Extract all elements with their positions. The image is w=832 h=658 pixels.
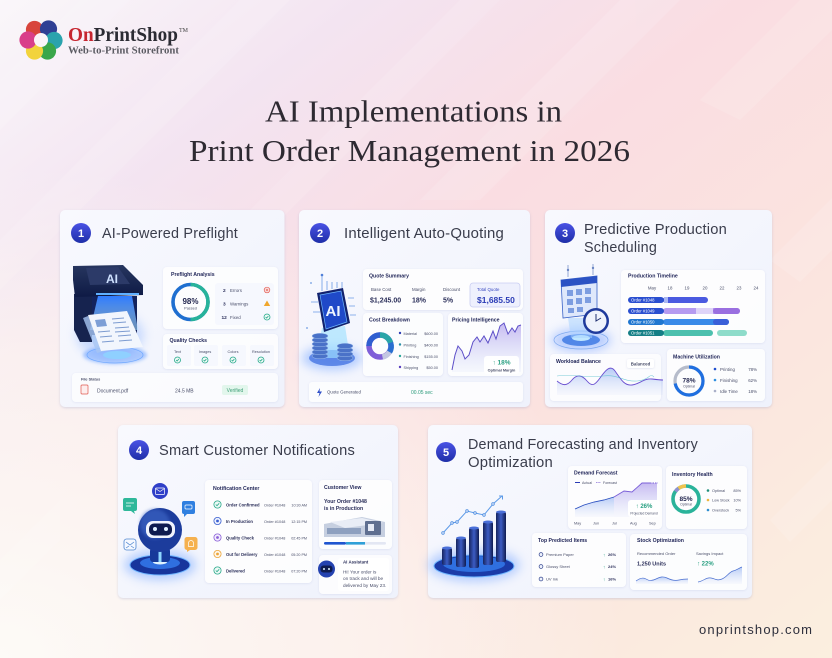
panel: Customer View: is in Production: [324, 506, 363, 512]
row: Quality Check: Quality Check: [226, 536, 255, 540]
row: Quality Check: 02:45 PM: [291, 536, 307, 540]
row: Order Confirmed: Order #1048: [264, 504, 285, 508]
legend: Optimal: [712, 489, 725, 493]
row: Out for Delivery: Out for Delivery: [226, 552, 258, 557]
legend: $155.00: [424, 355, 438, 359]
panel: File Status: [72, 373, 278, 402]
donut 85%: Optimal: [680, 502, 692, 506]
callout +18%: Optimal Margin: [488, 368, 516, 372]
panel: Stock Optimization: ↑ 22%: [697, 562, 714, 568]
row: Quality Check: [214, 534, 307, 541]
badge 4: [129, 440, 149, 460]
panel: Quote Generated: 00.05 sec: [411, 390, 433, 396]
panel: Demand Forecast: Jun: [593, 522, 599, 526]
panel: Production Timeline: 19: [685, 286, 690, 290]
status rows: Fixed: [230, 315, 241, 320]
panel: Customer View: Customer View: [324, 485, 362, 491]
badge 3: 3: [562, 228, 568, 240]
panel: Demand Forecast: [568, 466, 662, 529]
legend: $400.00: [424, 344, 438, 348]
callout +18%: [484, 356, 519, 374]
badge 3: [555, 223, 575, 243]
panel: Workload Balance: [550, 354, 663, 401]
legend: Finishing: [404, 355, 419, 359]
donut 98%: 98%: [182, 297, 199, 306]
panel: Quote Generated: [309, 382, 523, 402]
panel: Machine Utilization: Machine Utilization: [673, 354, 720, 360]
row: Order Confirmed: [214, 501, 307, 508]
panel: Customer View: Your Order #1048: [324, 499, 367, 505]
bot avatar: [318, 560, 335, 578]
panel: Demand Forecast: Jul: [612, 522, 617, 526]
illustration: calendar and clock: [551, 264, 611, 352]
logo: [19, 20, 189, 60]
panel: Demand Forecast: May: [574, 522, 581, 526]
panel: Quote Summary: Total Quote: [477, 287, 500, 292]
callout +18%: ↑ 18%: [492, 360, 511, 366]
row: Delivered: [214, 567, 307, 574]
badge 5: 5: [443, 447, 449, 459]
panel: Notification Center: [205, 480, 312, 583]
status rows: 3: [223, 302, 226, 308]
row: Out for Delivery: 05:20 PM: [291, 553, 307, 557]
illustration: robot and message icons: [123, 483, 198, 580]
legend: 78%: [748, 367, 757, 372]
title: AI Implementations in: [265, 94, 563, 128]
panel: Top Predicted Items: Top Predicted Items: [538, 538, 587, 544]
legend: Overstock: [712, 508, 729, 512]
heading: Optimization: [468, 455, 553, 471]
sparkline: order: [636, 577, 688, 584]
legend: 10%: [733, 498, 742, 502]
illustration: AI chip and coins: AI: [326, 303, 340, 320]
icon: green chat: [123, 498, 137, 514]
row: Delivered: 07:20 PM: [291, 570, 307, 574]
donut 85%: [673, 486, 699, 512]
donut 98%: [173, 284, 208, 320]
panel: Quote Generated: Quote Generated: [327, 390, 361, 394]
panel: Notification Center: Notification Center: [213, 486, 259, 492]
heading: Demand Forecasting and Inventory: [468, 437, 699, 453]
panel: Demand Forecast: Sep: [649, 522, 656, 526]
heading: Predictive Production: [584, 222, 727, 238]
sparkline: savings: [698, 567, 742, 584]
row: In Production: In Production: [226, 519, 253, 524]
panel: card 1 AI-Powered Preflight: [60, 210, 284, 407]
illustration: AI chip and coins: [302, 274, 362, 370]
callout +26%: ↑ 26%: [636, 504, 653, 510]
badge 2: 2: [317, 228, 323, 240]
panel: Cost Breakdown: [363, 313, 443, 376]
panel: Workload Balance: Workload Balance: [556, 359, 601, 365]
heading: Scheduling: [584, 240, 657, 256]
badge 5: [436, 442, 456, 462]
icon: orange bell: [184, 537, 198, 552]
donut 78%: Optimal: [683, 384, 695, 388]
gantt bars: Order #1049: [631, 309, 655, 314]
row: In Production: Order #1048: [264, 520, 285, 524]
status rows: Errors: [230, 288, 243, 293]
panel: Production Timeline: 22: [720, 286, 725, 290]
gantt bars: Order #1051: [631, 331, 655, 336]
footer url: onprintshop.com: [699, 622, 812, 637]
donut 78%: [675, 367, 703, 395]
heading: [584, 222, 727, 256]
panel: AI Assistant: on track and will be: [343, 576, 384, 581]
badge 1: 1: [78, 228, 84, 240]
status rows: Warnings: [230, 302, 249, 306]
legend: [399, 332, 438, 370]
panel: Production Timeline: May: [648, 286, 657, 290]
legend: Printing: [720, 367, 735, 372]
row: Order Confirmed: 10:30 AM: [291, 504, 307, 508]
status rows: 12: [222, 315, 227, 321]
icon: white mail: [124, 539, 136, 550]
press machine: [324, 517, 385, 537]
panel: Production Timeline: 23: [737, 286, 742, 290]
rows: ↑: [603, 552, 605, 557]
panel: Quote Summary: $1,245.00: [370, 298, 401, 304]
panel: File Status: Verified: [227, 388, 244, 394]
rows: UV Ink: [546, 576, 558, 582]
panel: Quality Checks: Quality Checks: [170, 338, 207, 344]
panel: Quote Summary: [363, 269, 523, 310]
rows: ↑: [603, 564, 605, 569]
panel: Demand Forecast: Actual: [582, 481, 592, 485]
panel: Stock Optimization: Recommended Order: [637, 551, 676, 556]
panel: Quote Summary: 5%: [443, 298, 454, 304]
status rows: [215, 283, 274, 325]
panel: Stock Optimization: [630, 534, 747, 590]
rows: Premium Paper: [546, 552, 574, 557]
panel: card 3 Predictive Production Scheduling: [545, 210, 772, 407]
panel: Production Timeline: 18: [668, 286, 673, 290]
status rows: 2: [223, 288, 226, 294]
legend: 62%: [748, 378, 757, 383]
panel: card 2 Intelligent Auto-Quoting: [299, 210, 530, 407]
legend: Printing: [404, 344, 416, 348]
panel: Inventory Health: [666, 466, 747, 529]
panel: Pricing Intelligence: [448, 313, 523, 376]
row: Delivered: Order #1048: [264, 570, 285, 574]
title: Print Order Management in 2026: [189, 133, 630, 168]
panel: Quote Summary: $1,685.50: [477, 295, 515, 305]
panel: AI Assistant: delivered by May 23.: [343, 583, 386, 588]
rows: ↑: [603, 577, 605, 582]
panel: Demand Forecast: Demand Forecast: [574, 470, 618, 476]
legend: $50.00: [426, 366, 438, 370]
logo wordmark: OnPrintShop: [68, 24, 178, 46]
heading: AI-Powered Preflight: [102, 226, 238, 242]
panel: Stock Optimization: Savings Impact: [696, 551, 724, 556]
legend: Material: [404, 332, 417, 336]
legend: Low Stock: [712, 498, 730, 502]
rows: [539, 552, 616, 582]
panel: Preflight Analysis: Preflight Analysis: [171, 272, 215, 278]
donut 85%: 85%: [679, 496, 693, 503]
gantt bars: [628, 297, 747, 336]
panel: AI Assistant: Hi! Your order is: [343, 570, 377, 574]
panel: File Status: File Status: [81, 378, 100, 382]
panel: card 5 Demand Forecasting and Inventory Optimization: [428, 425, 752, 598]
legend: 85%: [733, 489, 742, 493]
rows: 26%: [608, 552, 616, 557]
panel: Stock Optimization: 1,250 Units: [637, 562, 666, 568]
panel: Workload Balance: Balanced: [631, 362, 651, 366]
panel: Cost Breakdown: Cost Breakdown: [369, 318, 410, 324]
panel: Production Timeline: [621, 270, 765, 343]
heading: Intelligent Auto-Quoting: [344, 226, 504, 242]
panel: AI Assistant: AI Assistant: [343, 560, 369, 564]
panel: Demand Forecast: Forecast: [603, 481, 617, 485]
donut 98%: Passed: [184, 306, 197, 310]
icon: blue chat: [182, 501, 195, 517]
row: Out for Delivery: Order #1048: [264, 553, 285, 557]
panel: Quote Summary: Discount: [443, 287, 461, 292]
area chart: [452, 323, 521, 372]
legend: [714, 367, 757, 394]
panel: Quality Checks: Text: [174, 350, 182, 354]
donut 78%: 78%: [682, 378, 696, 384]
panel: Inventory Health: Inventory Health: [672, 472, 713, 478]
logo mark: colour petals: [19, 20, 63, 60]
callout +26%: Projected Demand: [630, 512, 658, 516]
panel: Stock Optimization: Stock Optimization: [637, 538, 684, 544]
logo tagline: Web-to-Print Storefront: [68, 46, 180, 56]
illustration: AI printer: [73, 265, 147, 364]
legend: 5%: [736, 508, 742, 512]
gantt bars: Order #1048: [631, 298, 655, 303]
panel: AI Assistant: [318, 555, 392, 594]
donut: [369, 335, 391, 357]
badge 2: [310, 223, 330, 243]
rows: Glossy Sheet: [546, 564, 571, 569]
panel: Production Timeline: Production Timeline: [628, 274, 678, 280]
row: Delivered: Delivered: [226, 568, 245, 574]
heading: [468, 437, 699, 471]
title: [189, 94, 630, 168]
logo trademark: TM: [179, 28, 189, 34]
wave chart: [557, 368, 663, 395]
row: Quality Check: Order #1048: [264, 536, 285, 540]
panel: card 4 Smart Customer Notifications: [118, 425, 398, 598]
panel: Quote Summary: Margin: [412, 287, 426, 292]
progress bar: [324, 542, 386, 545]
legend: Finishing: [720, 378, 738, 383]
panel: Top Predicted Items: [532, 533, 626, 587]
panel: Production Timeline: 20: [703, 286, 708, 290]
icon: mail top: [152, 483, 168, 499]
rows: 16%: [608, 576, 616, 582]
panel: Quality Checks: Resolution: [252, 350, 270, 354]
panel: Machine Utilization: [667, 349, 765, 401]
legend: 18%: [748, 389, 757, 394]
badge 1: [71, 223, 91, 243]
illustration: 3D bars with trend line: [428, 496, 520, 582]
row: In Production: 12:15 PM: [291, 520, 307, 524]
heading: Smart Customer Notifications: [159, 443, 355, 459]
gantt bars: Order #1050: [631, 320, 655, 325]
legend: Idle Time: [720, 389, 738, 394]
legend: [707, 489, 742, 512]
legend: $600.00: [424, 332, 438, 336]
panel: Quality Checks: Images: [199, 350, 211, 354]
panel: File Status: Document.pdf: [97, 388, 129, 394]
panel: Quality Checks: Colors: [228, 350, 239, 354]
row: Order Confirmed: Order Confirmed: [226, 502, 260, 508]
panel: Quote Summary: Base Cost: [371, 287, 392, 292]
legend: Shipping: [404, 366, 418, 370]
area line chart: [575, 483, 658, 517]
panel: Quality Checks: [163, 334, 278, 369]
badge 4: 4: [136, 445, 143, 457]
row: Out for Delivery: [214, 550, 307, 558]
panel: Demand Forecast: Aug: [630, 522, 637, 526]
panel: Quote Summary: Quote Summary: [369, 274, 409, 280]
callout +26%: [628, 500, 660, 517]
rows: 24%: [608, 564, 616, 569]
panel: Preflight Analysis: [163, 267, 278, 329]
illustration: AI printer: AI: [106, 272, 118, 286]
panel: Production Timeline: 24: [754, 286, 759, 290]
panel: Customer View: [319, 480, 392, 549]
panel: File Status: 24.5 MB: [175, 388, 194, 394]
panel: Pricing Intelligence: Pricing Intelligence: [452, 318, 500, 324]
panel: Quote Summary: 18%: [412, 298, 427, 304]
row: In Production: [214, 517, 307, 525]
